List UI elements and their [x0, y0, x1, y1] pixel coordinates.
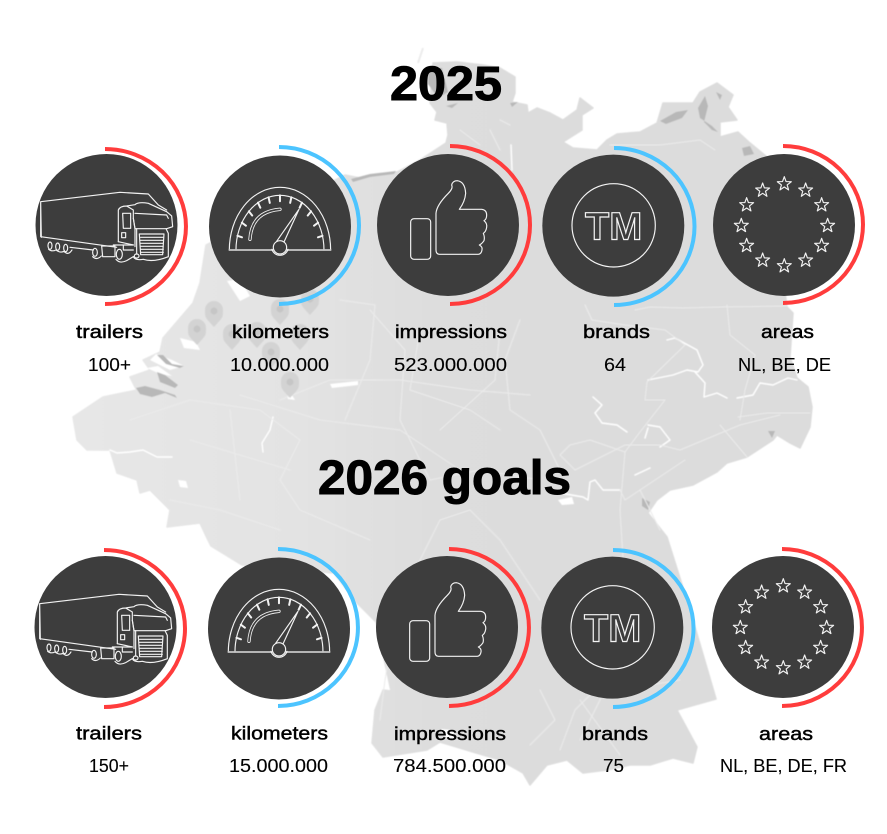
progress arc	[449, 549, 529, 706]
value: 784.500.000	[393, 755, 506, 776]
panel: 2026 goals	[34, 452, 862, 776]
label: impressions	[394, 723, 506, 744]
metric: trailers	[36, 149, 186, 375]
metric: kilometers	[209, 147, 359, 375]
icon: trademark: TM	[584, 607, 641, 651]
icon: speedometer	[209, 156, 351, 298]
label: kilometers	[231, 722, 328, 744]
icon: truck	[36, 154, 178, 296]
value: 10.000.000	[230, 354, 329, 375]
progress arc	[450, 146, 530, 304]
label: brands	[583, 321, 650, 342]
icon: trademark	[542, 155, 684, 297]
value: 523.000.000	[394, 354, 507, 375]
heading: 2026 goals: 2026 goals	[318, 452, 571, 505]
metric: impressions	[376, 549, 529, 776]
background map	[73, 48, 812, 785]
metric: brands	[542, 148, 695, 375]
value: 150+	[89, 755, 129, 776]
progress arc	[278, 549, 358, 706]
metric: trailers	[34, 550, 185, 776]
progress arc	[105, 149, 186, 304]
progress arc	[782, 549, 862, 706]
metric: impressions	[377, 146, 530, 375]
progress arc	[279, 147, 359, 304]
icon: european stars	[712, 556, 854, 698]
value: NL, BE, DE	[738, 354, 831, 375]
label: trailers	[76, 321, 143, 342]
icon: truck	[34, 556, 176, 698]
metric: areas	[713, 146, 863, 375]
value: 100+	[88, 354, 131, 375]
icon: speedometer	[208, 558, 350, 700]
label: areas	[759, 723, 813, 744]
icon: european stars	[713, 154, 855, 296]
metric: kilometers	[208, 549, 358, 776]
label: areas	[761, 321, 814, 342]
label: brands	[582, 723, 648, 744]
value: 64	[604, 354, 626, 375]
panel: 2025	[36, 58, 863, 375]
icon: thumbs up	[376, 556, 518, 698]
icon: trademark	[541, 557, 683, 699]
progress arc	[783, 146, 863, 303]
value: 75	[603, 755, 624, 776]
metric: areas	[712, 549, 862, 776]
icon: thumbs up	[377, 154, 519, 296]
progress arc	[104, 550, 185, 707]
label: trailers	[76, 722, 142, 744]
heading: 2025: 2025	[390, 58, 502, 111]
label: kilometers	[232, 321, 329, 342]
value: 15.000.000	[229, 755, 328, 776]
metric: brands	[541, 550, 694, 776]
value: NL, BE, DE, FR	[720, 755, 847, 776]
icon: trademark: TM	[585, 205, 642, 249]
progress arc	[614, 148, 695, 305]
label: impressions	[395, 321, 507, 342]
progress arc	[613, 550, 694, 707]
